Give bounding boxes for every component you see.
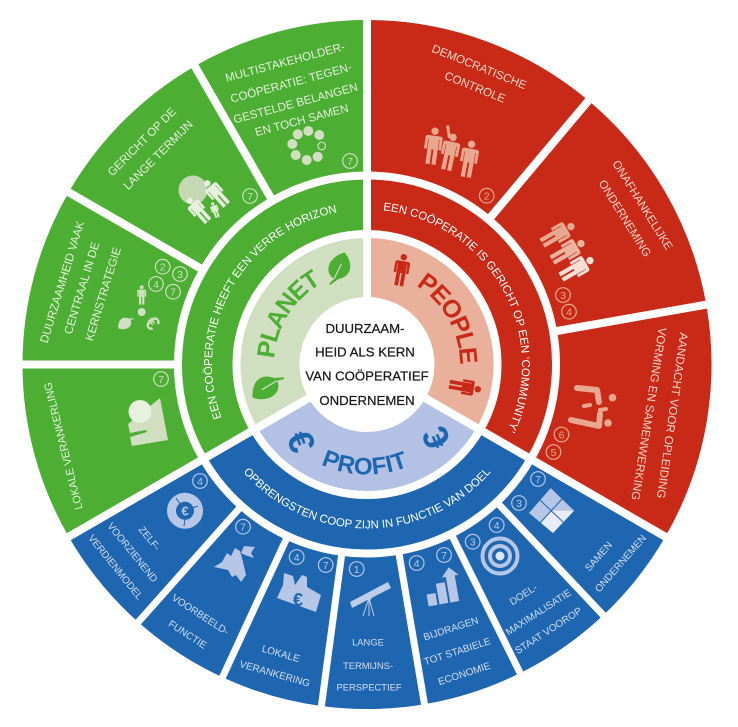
segment: lange termijnsperspectief: [332, 562, 412, 692]
text: duurzaamheid vaak centraal in de kernstrategie: KERNSTRATEGIE: [83, 246, 124, 342]
icon: tree with people: [178, 176, 232, 226]
reference numbers 4 7: 7: [323, 560, 329, 572]
text: democratische controle: DEMOCRATISCHE: [430, 42, 529, 92]
reference numbers 7 3: 7: [535, 474, 541, 486]
panel: planet outer segments: [38, 40, 367, 511]
text: bijdragen tot stabiele economie: BIJDRAGEN: [422, 615, 480, 644]
icon: leaf top: [322, 249, 355, 290]
reference number 2: [479, 188, 494, 203]
icon: euro cycle: €: [181, 504, 189, 518]
text: lange termijnsperspectief: TERMIJNS-: [343, 660, 393, 671]
icon: factory with euro: €: [293, 590, 303, 610]
reference numbers 2 3 4 7: 4: [153, 279, 159, 291]
text: doel-maximalisatie staat voorop: [504, 582, 584, 657]
text: gericht op de lange termijn: LANGE TERMIJN: [121, 118, 196, 193]
reference numbers 4 7: [409, 548, 451, 570]
segment: onafhankelijke onderneming: [538, 158, 675, 319]
text: lange termijnsperspectief: LANGE: [352, 636, 384, 648]
icon: people helping each other: [571, 388, 616, 427]
text: bijdragen tot stabiele economie: [422, 615, 493, 688]
reference number 7: 7: [347, 156, 353, 168]
segment: aandacht voor opleiding: [546, 318, 690, 501]
inner ring: people: [371, 238, 494, 424]
middle ring: people statement: [371, 180, 552, 454]
reference numbers 3 4: 3: [560, 290, 566, 302]
middle ring: people statement: EEN COÖPERATIE IS GERICHT OP EEN ‘COMMUNITY’: [384, 202, 530, 434]
text: voorbeeldfunctie: FUNCTIE: [166, 619, 209, 652]
text: zelf-voorzienend verdienmodel: ZELF-: [136, 525, 162, 553]
icon: target: [482, 538, 518, 574]
icon: circle of dots: [287, 126, 326, 165]
text: lokale verankering: VERANKERING: [238, 659, 311, 690]
reference numbers 7 3: 3: [516, 498, 522, 510]
icon: people planet profit: €: [140, 312, 164, 335]
icon: puzzle: [529, 488, 574, 533]
icon: people planet profit: [115, 285, 164, 335]
reference numbers 4 7: 4: [414, 558, 420, 570]
text: multistakeholder-coöperatie: [224, 40, 359, 139]
segment: lokale verankering: [238, 550, 333, 690]
inner ring: people: PEOPLE: [418, 272, 478, 364]
reference numbers 3 4: [465, 518, 504, 549]
reference numbers 2 3 4 7: 3: [177, 269, 183, 281]
reference numbers 3 4: 3: [470, 536, 476, 548]
reference numbers 6 5: 5: [551, 447, 557, 459]
reference number 2: 2: [484, 190, 490, 202]
icon: person top: [391, 253, 412, 287]
text: zelf-voorzienend verdienmodel: VOORZIENEND: [104, 521, 159, 585]
text: lokale verankering: [238, 644, 311, 690]
reference number 4: 4: [197, 476, 203, 488]
segment: doelmaximalisatie: [465, 518, 584, 657]
text: multistakeholder-coöperatie: COÖPERATIE: TEGEN-: [229, 61, 353, 106]
middle ring: planet statement: EEN COÖPERATIE HEEFT EEN VERRE HORIZON: [202, 204, 336, 420]
text: democratische controle: CONTROLE: [443, 69, 507, 106]
reference numbers 3 4: 4: [494, 520, 500, 532]
text: aandacht voor opleiding, vorming en samenwerking: [628, 327, 690, 501]
text: multistakeholder-coöperatie: EN TOCH SAMEN: [254, 102, 350, 139]
panel: profit outer segments: [85, 472, 649, 692]
inner ring: planet: PLANET: [257, 268, 317, 358]
text: duurzaamheid vaak centraal in de kernstrategie: CENTRAAL IN DE: [62, 240, 102, 336]
reference numbers 3 4: 4: [566, 306, 572, 318]
icon: person side: [448, 377, 482, 397]
center title: [305, 321, 429, 408]
text: doel-maximalisatie staat voorop: DOEL-: [508, 582, 540, 608]
segment: samen ondernemen: [512, 472, 649, 595]
segment: voorbeeldfunctie: [166, 519, 255, 652]
segment: lokale verankerling: LOKALE VERANKERLING: [42, 381, 86, 511]
segment: lokale verankerling: [42, 364, 168, 511]
reference numbers 2 3 4 7: [149, 259, 187, 299]
center title: DUURZAAM-: [325, 321, 405, 336]
icon: telescope: [350, 582, 391, 616]
middle ring: profit statement: [208, 435, 526, 550]
center title: ONDERNEMEN: [319, 393, 415, 408]
middle ring: planet statement: [182, 180, 363, 454]
reference numbers 7 3: [512, 472, 545, 510]
text: duurzaamheid vaak centraal in de kernstrategie: DUURZAAMHEID VAAK: [38, 219, 87, 345]
icon: rising bar chart: [423, 566, 463, 606]
text: zelf-voorzienend verdienmodel: VERDIENMODEL: [85, 533, 145, 603]
middle ring: profit statement: OPBRENGSTEN COOP ZIJN IN FUNCTIE VAN DOEL: [244, 468, 491, 529]
icon: euro left: €: [278, 425, 324, 458]
icon: factory with tree: [128, 398, 168, 446]
reference numbers 6 5: 6: [559, 430, 565, 442]
text: aandacht voor opleiding, vorming en samenwerking: AANDACHT VOOR OPLEIDING: [654, 332, 690, 499]
segment: zelfvoorzienend verdienmodel: [85, 474, 207, 603]
text: voorbeeldfunctie: VOORBEELD-: [169, 593, 230, 638]
reference numbers 4 7: 7: [441, 550, 447, 562]
segment: multistakeholder-coöperatie: [224, 40, 367, 168]
text: aandacht voor opleiding, vorming en samenwerking: VORMING EN SAMENWERKING: [628, 327, 669, 501]
reference number 7: 7: [158, 374, 164, 386]
reference numbers 2 3 4 7: 7: [170, 286, 176, 298]
text: bijdragen tot stabiele economie: TOT STABIELE: [423, 636, 493, 668]
reference numbers 4 7: 4: [294, 552, 300, 564]
segment: democratische controle: [367, 42, 540, 203]
segment: duurzaamheid vaak centraal: [38, 219, 187, 364]
text: samen ondernemen: ONDERNEMEN: [593, 533, 649, 595]
reference numbers 6 5: [546, 427, 569, 459]
text: zelf-voorzienend verdienmodel: [85, 521, 162, 603]
reference number 7: [343, 154, 357, 168]
text: gericht op de lange termijn: GERICHT OP DE: [105, 105, 179, 179]
icon: mountain with flag: [214, 546, 255, 582]
text: onafhankelijke onderneming: ONDERNEMING: [596, 178, 653, 259]
icon: factory with euro: [277, 573, 321, 612]
text: lange termijnsperspectief: PERSPECTIEF: [336, 682, 402, 692]
text: duurzaamheid vaak centraal in de kernstrategie: [38, 219, 124, 345]
reference number 7: 7: [247, 191, 253, 203]
reference number 7: 7: [240, 522, 246, 534]
icon: euro right: €: [413, 420, 459, 456]
text: lange termijnsperspectief: [336, 636, 402, 692]
text: samen ondernemen: SAMEN: [583, 540, 615, 574]
inner ring: profit: PROFIT: [322, 450, 404, 475]
text: multistakeholder-coöperatie: GESTELDE BELANGEN: [232, 81, 359, 126]
text: multistakeholder-coöperatie: MULTISTAKEHOLDER-: [224, 40, 346, 85]
icon: three people: [538, 217, 597, 285]
center title: VAN COÖPERATIEF: [305, 368, 429, 384]
reference numbers 4 7: [289, 550, 333, 572]
inner ring: planet: [240, 238, 363, 424]
reference numbers 2 3 4 7: 2: [160, 262, 166, 274]
text: onafhankelijke onderneming: ONAFHANKELIJKE: [609, 158, 675, 253]
segment: bijdragen tot stabiele economie: [409, 548, 493, 688]
text: bijdragen tot stabiele economie: ECONOMIE: [437, 661, 492, 688]
inner ring: profit: [260, 402, 474, 491]
center title: HEID ALS KERN: [315, 344, 415, 360]
panel: people outer segments: [367, 42, 690, 501]
segment: gericht op de lange termijn: [105, 105, 257, 230]
text: doel-maximalisatie staat voorop: MAXIMALISATIE: [504, 587, 574, 638]
text: lokale verankering: LOKALE: [260, 644, 301, 665]
reference number 1: 1: [354, 564, 360, 576]
reference numbers 3 4: [556, 288, 576, 319]
reference number 7: [243, 189, 257, 203]
text: doel-maximalisatie staat voorop: STAAT VOOROP: [513, 605, 584, 657]
reference number 7: [154, 372, 168, 386]
icon: three people voting: [422, 125, 481, 179]
icon: leaf bottom: [246, 367, 289, 406]
